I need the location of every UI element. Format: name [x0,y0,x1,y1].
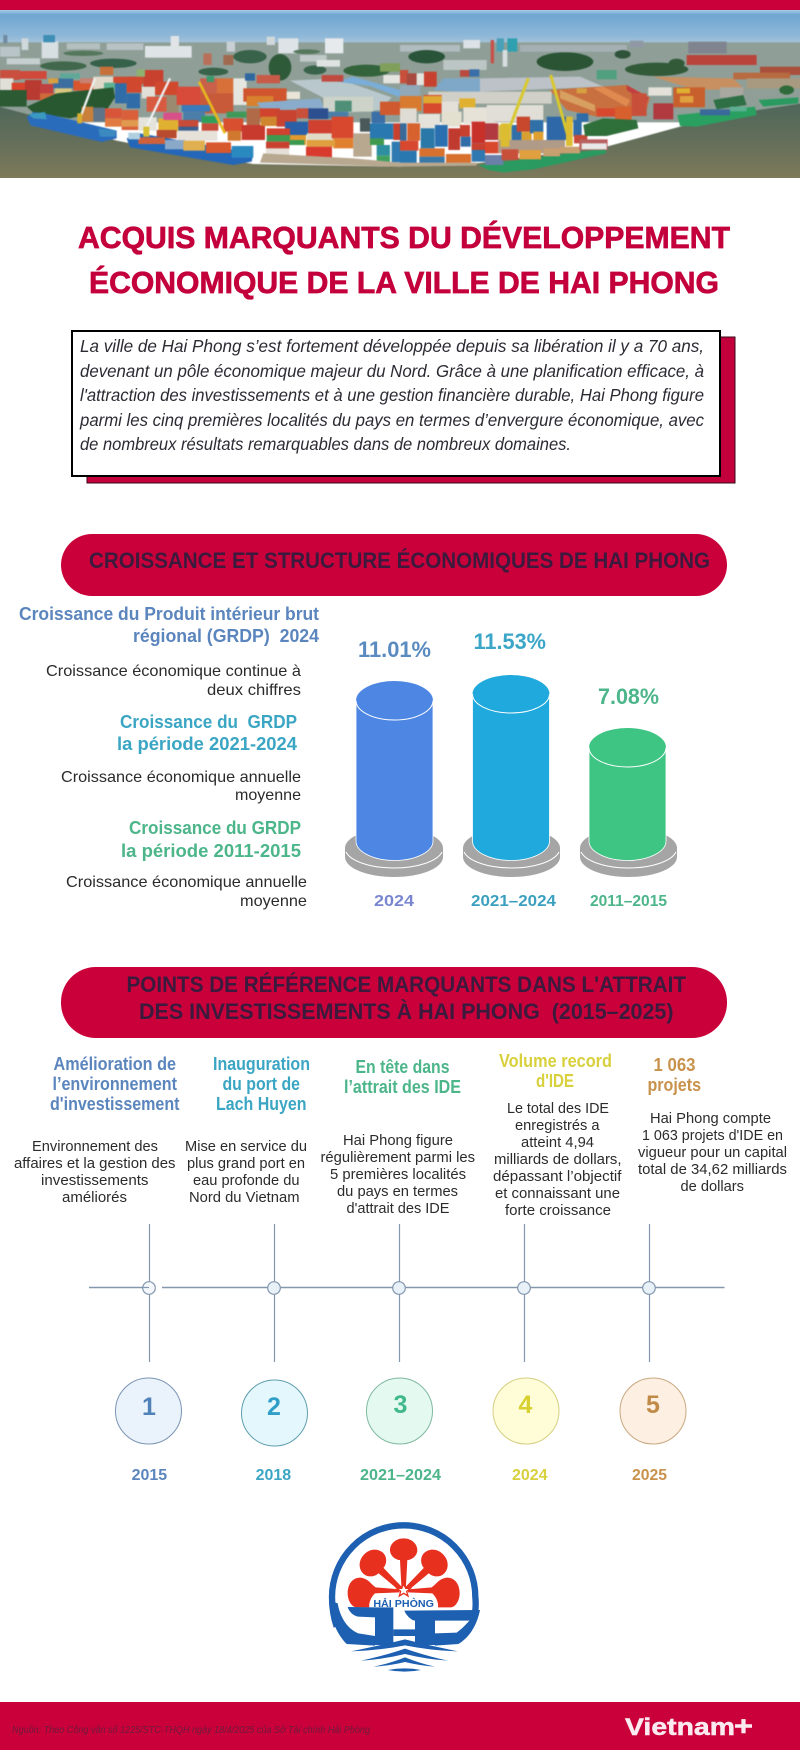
numbered circle 2, 2018: 2 [267,1393,281,1421]
numbered circle 1, 2015: 1 [142,1393,156,1421]
milestone column 5: vigueur pour un capital [638,1144,787,1161]
numbered circle 2, 2018 [242,1380,308,1484]
milestone column 4: dépassant l’objectif [493,1168,622,1185]
milestone column 5: 1 063 [654,1055,696,1075]
milestone column 2: plus grand port en [187,1155,305,1172]
text block: GRDP 2021-2024 [61,712,301,804]
Vietnam+ wordmark: Vietnam [625,1714,735,1741]
top red bar [0,0,800,10]
milestone column 1: investissements [41,1172,148,1189]
text block: GRDP 2011-2015: Croissance économique annuelle [66,874,307,891]
timeline axis with markers [89,1224,724,1362]
text block: GRDP 2021-2024: Croissance économique annuelle [61,769,301,786]
milestone column 5 [638,1055,787,1195]
cylinder 2021-2024: 11.53%: 2021–2024 [471,893,556,910]
milestone column 4: enregistrés a [515,1117,600,1134]
milestone column 1: l’environnement [52,1074,177,1094]
cylinder 2024: 11.01%: 11.01% [358,637,431,662]
milestone column 2: Nord du Vietnam [189,1189,300,1206]
milestone column 1: Environnement des [32,1138,158,1155]
text block: GRDP 2011-2015: moyenne [240,893,307,910]
milestone column 4: Volume record [499,1051,612,1071]
milestone column 1: affaires et la gestion des [14,1155,176,1172]
bar chart: 3D cylinders of GRDP growth [345,629,677,910]
numbered circle 4, 2024 [493,1378,559,1484]
ships left [27,112,117,142]
Vietnam+ wordmark: + [734,1711,753,1741]
milestone column 3: Hai Phong figure [343,1132,453,1149]
milestone column 3 [320,1057,475,1217]
Hai Phong city logo [329,1525,480,1672]
milestone column 5: total de 34,62 milliards [638,1161,787,1178]
text block: GRDP 2021-2024: Croissance du GRDP [120,712,297,732]
cylinder 2011-2015: 7.08%: 7.08% [598,684,659,709]
yard left [0,70,20,80]
milestone column 3: du pays en termes [337,1183,458,1200]
section heading: growth and structure [61,534,727,596]
footer band [0,1702,800,1750]
milestone column 1: améliorés [62,1189,127,1206]
milestone column 3: d'attrait des IDE [346,1200,450,1217]
section heading: investment milestones: DES INVESTISSEMENTS À HAI PHONG (2015–2025) [139,999,674,1024]
cylinder 2011-2015: 7.08%: 2011–2015 [590,893,667,910]
numbered circle 5, 2025: 2025 [632,1467,667,1484]
section heading: growth and structure: CROISSANCE ET STRUCTURE ÉCONOMIQUES DE HAI PHONG [89,548,710,573]
milestone column 1: d'investissement [50,1094,180,1114]
milestone column 3: En tête dans [356,1057,450,1077]
text block: GRDP 2021-2024: la période 2021-2024 [117,734,297,754]
source note: Nguồn: Theo Công văn số 1225/STC-THQH ngày 18/4/2025 của Sở Tài chính Hải Phòng [12,1724,370,1736]
text block: GRDP 2011-2015: la période 2011-2015 [121,841,301,861]
numbered circle 3, 2021-2024: 2021–2024 [360,1467,441,1484]
section heading: investment milestones: POINTS DE RÉFÉRENCE MARQUANTS DANS L'ATTRAIT [126,972,687,997]
milestone column 2: du port de [222,1074,300,1094]
milestone column 5: 1 063 projets d'IDE en [642,1127,783,1144]
title [78,220,730,300]
text block: GRDP 2024: Croissance du Produit intérieur brut [19,604,319,624]
numbered circle 2, 2018: 2018 [256,1467,291,1484]
milestone column 4: milliards de dollars, [494,1151,622,1168]
milestone column 4: Le total des IDE [507,1100,609,1117]
milestone column 3: 5 premières localités [330,1166,466,1183]
milestone column 5: projets [648,1075,701,1095]
milestone column 4: et connaissant une [495,1185,620,1202]
milestone column 2 [185,1054,310,1206]
text block: GRDP 2011-2015 [66,818,307,910]
intro text box with red drop shadow: La ville de Hai Phong s’est fortement développée depuis sa libération il y a 70 ans, [80,336,704,356]
text block: GRDP 2011-2015: Croissance du GRDP [129,818,301,838]
milestone column 4 [493,1051,622,1219]
river across the whole photo [0,103,800,178]
text block: GRDP 2024: Croissance économique continue à [46,663,301,680]
intro text box with red drop shadow: devenant un pôle économique majeur du Nord. Grâce à une planification efficace, à [80,361,704,381]
section heading: investment milestones [61,967,727,1038]
milestone column 2: Lach Huyen [216,1094,306,1114]
cylinder 2024: 11.01%: 2024 [374,893,414,910]
intro text box with red drop shadow [72,331,735,483]
Vietnam+ wordmark [625,1711,753,1741]
milestone column 2: eau profonde du [193,1172,300,1189]
milestone column 2: Mise en service du [185,1138,307,1155]
milestone column 4: forte croissance [505,1202,611,1219]
numbered circle 3, 2021-2024: 3 [394,1391,407,1419]
title: ÉCONOMIQUE DE LA VILLE DE HAI PHONG [89,265,719,300]
header photo: container port on the river [0,10,800,178]
milestone column 1: Amélioration de [54,1054,176,1074]
milestone column 4: atteint 4,94 [521,1134,594,1151]
numbered circle 1, 2015: 2015 [132,1467,167,1484]
milestone column 5: Hai Phong compte [650,1110,771,1127]
text block: GRDP 2024: deux chiffres [207,682,301,699]
milestone column 3: l’attrait des IDE [344,1077,461,1097]
text block: GRDP 2021-2024: moyenne [235,787,301,804]
numbered circle 3, 2021-2024 [360,1378,441,1484]
title: ACQUIS MARQUANTS DU DÉVELOPPEMENT [78,220,730,255]
milestone column 5: de dollars [680,1178,744,1195]
numbered circle 1, 2015 [116,1378,182,1484]
milestone column 2: Inauguration [213,1054,310,1074]
text block: GRDP 2024: régional (GRDP) 2024 [133,626,319,646]
intro text box with red drop shadow: de nombreux résultats remarquables dans de nombreux domaines. [80,434,571,454]
intro text box with red drop shadow: l'attraction des investissements et à une gestion financière durable, Hai Phong figure [80,385,704,405]
city and yard right, shifted by 1200 [400,38,800,163]
Hai Phong city logo: HẢI PHÒNG [373,1598,434,1610]
milestone column 1 [14,1054,180,1206]
city left [42,42,58,58]
cylinder 2024: 11.01% [345,637,443,910]
cylinder 2011-2015: 7.08% [580,684,677,910]
numbered circle 5, 2025 [620,1378,686,1484]
intro text box with red drop shadow: parmi les cinq premières localités du pays en termes d’envergure économique, avec [79,410,704,430]
numbered circle 5, 2025: 5 [646,1391,660,1419]
milestone column 3: régulièrement parmi les [320,1149,475,1166]
numbered circle 4, 2024: 2024 [512,1467,548,1484]
numbered circle 4, 2024: 4 [519,1391,533,1419]
milestone column 4: d'IDE [536,1071,574,1091]
cylinder 2021-2024: 11.53% [463,629,560,910]
cylinder 2021-2024: 11.53%: 11.53% [474,629,546,654]
text block: GRDP 2024 [19,604,319,699]
